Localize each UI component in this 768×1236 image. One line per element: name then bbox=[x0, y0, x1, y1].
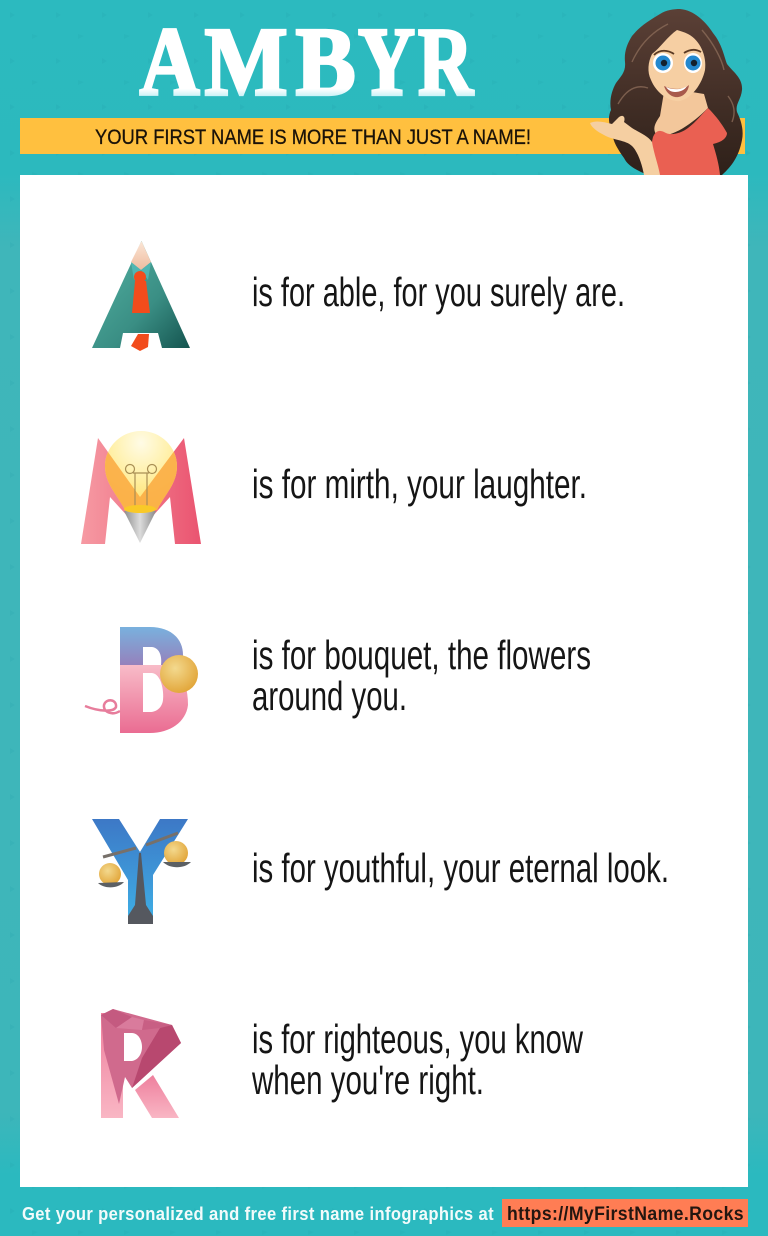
text: R lines: is for righteous, you know bbox=[252, 1016, 584, 1062]
arm and hand bbox=[590, 116, 660, 175]
text: B lines: is for bouquet, the flowers bbox=[252, 632, 591, 678]
mouth bbox=[664, 85, 689, 97]
title bbox=[140, 8, 474, 116]
neck and chest bbox=[654, 92, 708, 135]
icon: letter A with tie bbox=[92, 241, 190, 351]
text: B lines bbox=[252, 632, 591, 719]
title: A bbox=[140, 8, 200, 116]
title: B bbox=[296, 8, 356, 116]
footer text: Get your personalized and free first name infographics at bbox=[22, 1204, 494, 1224]
face bbox=[648, 30, 705, 101]
text: A line: is for able, for you surely are. bbox=[252, 269, 625, 315]
icon: letter M with light bulb bbox=[81, 431, 201, 544]
shirt bbox=[651, 108, 727, 175]
icon: letter R with gem bbox=[101, 1009, 181, 1118]
title: Y bbox=[358, 8, 415, 116]
text: B lines: around you. bbox=[252, 673, 407, 719]
character illustration bbox=[590, 9, 743, 175]
text: R lines bbox=[251, 1016, 584, 1103]
footer link badge: https://MyFirstName.Rocks bbox=[507, 1204, 744, 1225]
text: M line: is for mirth, your laughter. bbox=[252, 461, 587, 507]
tagline banner: YOUR FIRST NAME IS MORE THAN JUST A NAME! bbox=[95, 125, 531, 149]
eyes bbox=[653, 50, 702, 73]
icon: letter B piggy bank bbox=[85, 627, 198, 733]
tagline banner bbox=[20, 118, 745, 154]
title: M bbox=[205, 8, 288, 116]
title: R bbox=[418, 8, 474, 116]
icon: letter Y with scales bbox=[92, 819, 191, 924]
white content card bbox=[20, 175, 748, 1187]
hair bbox=[609, 9, 743, 175]
text: R lines: when you're right. bbox=[251, 1057, 484, 1103]
